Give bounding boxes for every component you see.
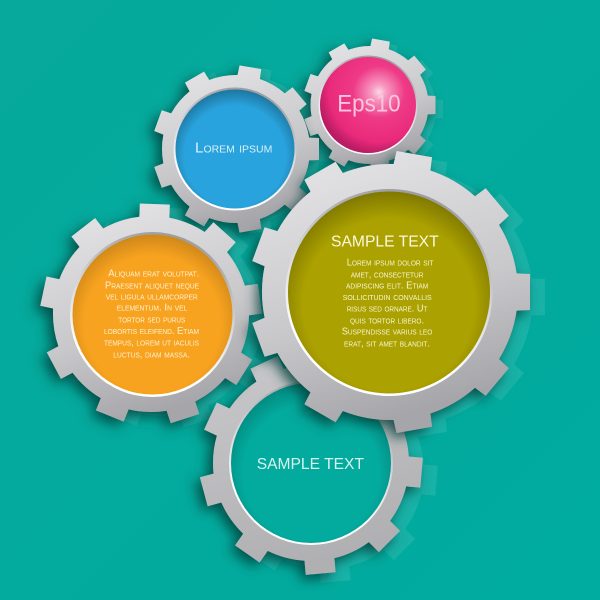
open centre: [231, 383, 391, 543]
olive paragraph: quis tortor libero.: [350, 315, 424, 326]
olive paragraph: Suspendisse varius leo: [342, 327, 433, 338]
olive disc: [288, 192, 490, 394]
olive paragraph: sollicitudin convallis: [343, 292, 432, 303]
gear: olive: [240, 142, 540, 442]
blue disc: [176, 90, 294, 208]
olive paragraph: risus sed ornare. Ut: [347, 304, 428, 315]
orange paragraph: [104, 269, 199, 360]
orange paragraph: tempus, lorem ut iaculis: [104, 338, 199, 349]
olive paragraph: [342, 258, 434, 349]
olive paragraph: adipiscing elit. Etiam: [346, 281, 428, 292]
orange disc: [72, 234, 232, 394]
orange paragraph: vel ligula ullamcorper: [106, 291, 198, 302]
gear: pink Eps10: [300, 35, 440, 175]
label: Sample text: SAMPLE TEXT: [257, 456, 364, 473]
pink sphere: [320, 57, 416, 153]
orange paragraph: Praesent aliquet neque: [105, 280, 199, 291]
orange paragraph: lobortis eleifend. Etiam: [104, 326, 199, 337]
ghost gear reflections: [72, 44, 545, 583]
orange paragraph: elementum. In vel: [117, 303, 187, 314]
orange paragraph: tortor sed purus: [118, 315, 186, 326]
gear: bottom open ring: [191, 343, 431, 583]
olive paragraph: erat, sit amet blandit.: [344, 338, 430, 349]
olive paragraph: amet, consectetur: [351, 269, 423, 280]
olive paragraph: Lorem ipsum dolor sit: [347, 258, 434, 269]
label: Eps10: Eps10: [337, 91, 401, 118]
label: Lorem ipsum: Lorem ipsum: [195, 140, 272, 156]
orange paragraph: luctus, diam massa.: [113, 349, 190, 360]
gear: orange: [31, 194, 271, 434]
gear: blue Lorem ipsum: [146, 59, 326, 239]
heading: Sample text: SAMPLE TEXT: [331, 233, 439, 250]
orange paragraph: Aliquam erat volutpat.: [108, 269, 199, 280]
